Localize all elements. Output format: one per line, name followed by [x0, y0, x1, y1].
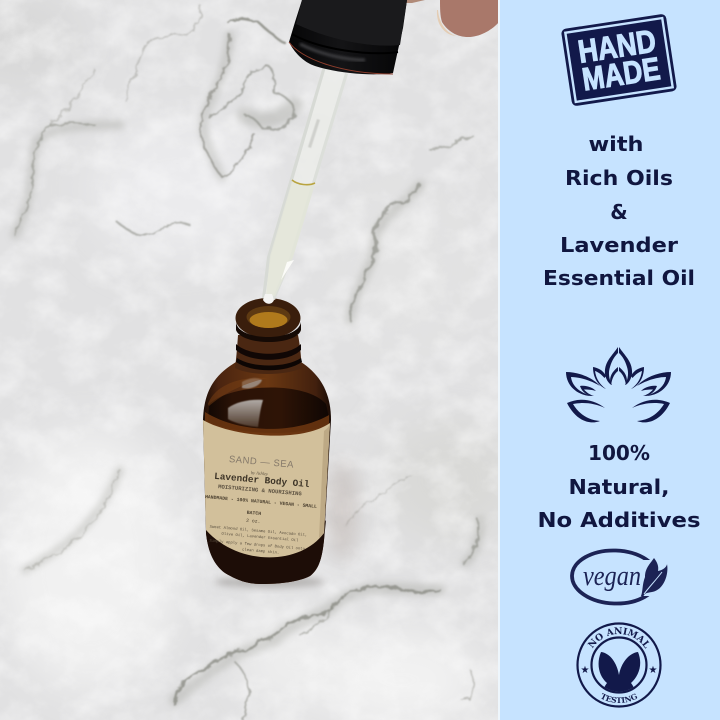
label text: clean damp skin. [242, 547, 279, 556]
bottom oil [206, 520, 326, 584]
label text [205, 456, 316, 554]
heading: ingredients text: & [610, 200, 628, 224]
label text: MOISTURIZING & NOURISHING [218, 483, 303, 498]
icon: hand made stamp: HAND [576, 23, 658, 70]
label text: Lavender Body Oil [214, 471, 310, 490]
dark oil upper band [208, 387, 329, 433]
amber glass bottle [201, 298, 331, 584]
heading: ingredients text [543, 132, 695, 290]
label text: 2 oz. [246, 518, 261, 525]
soft vein halos [15, 35, 480, 700]
heading: natural text [538, 441, 700, 532]
heading: natural text: Natural, [568, 475, 670, 499]
label text: HANDMADE - 100% NATURAL - VEGAN - SMALL [205, 494, 317, 510]
label text: Simply apply a few drops of Body Oil onto [209, 539, 306, 552]
finger [440, 0, 499, 37]
icon: no animal testing badge: ★ [581, 665, 590, 676]
label text: Sweet Almond Oil, Sesame Oil, Avocado Oil, [209, 525, 307, 538]
marble tonal patches [0, 0, 520, 720]
rabbit ears [599, 652, 640, 694]
icon: no animal testing badge [576, 622, 662, 708]
glass pipette [262, 66, 348, 304]
icon: lotus [566, 347, 671, 422]
icon: no animal testing badge: TESTING [601, 693, 638, 703]
panel: marble photo background [0, 0, 520, 720]
label text: BATCH [246, 510, 261, 517]
icon: no animal testing badge: ★ [649, 665, 658, 676]
marble veins [15, 5, 478, 720]
label text: by Ashley [251, 470, 268, 476]
badge text: NO ANIMAL [587, 627, 650, 649]
bottle lip [236, 298, 300, 338]
heading: ingredients text: Rich Oils [565, 166, 673, 190]
dropper cap [289, 0, 407, 74]
label text: Olive Oil, Lavender Essential Oil [221, 532, 299, 543]
panel: blue sidebar [500, 0, 720, 720]
kraft label [201, 420, 330, 559]
neck [235, 335, 302, 374]
heading: natural text: 100% [588, 441, 650, 465]
bottle body [203, 362, 331, 584]
glass highlight [228, 400, 263, 427]
icon: vegan badge [571, 549, 667, 605]
heading: ingredients text: Essential Oil [543, 266, 695, 290]
heading: ingredients text: with [588, 132, 644, 156]
bottle shadow [326, 460, 358, 560]
white divider [498, 0, 500, 720]
icon: hand made stamp: MADE [580, 50, 662, 97]
label text: SAND — SEA [228, 454, 295, 471]
dropper [262, 0, 499, 304]
heading: natural text: No Additives [538, 508, 700, 532]
icon: vegan badge: vegan [583, 561, 641, 592]
icon: hand made stamp [561, 14, 677, 106]
heading: ingredients text: Lavender [560, 233, 678, 257]
